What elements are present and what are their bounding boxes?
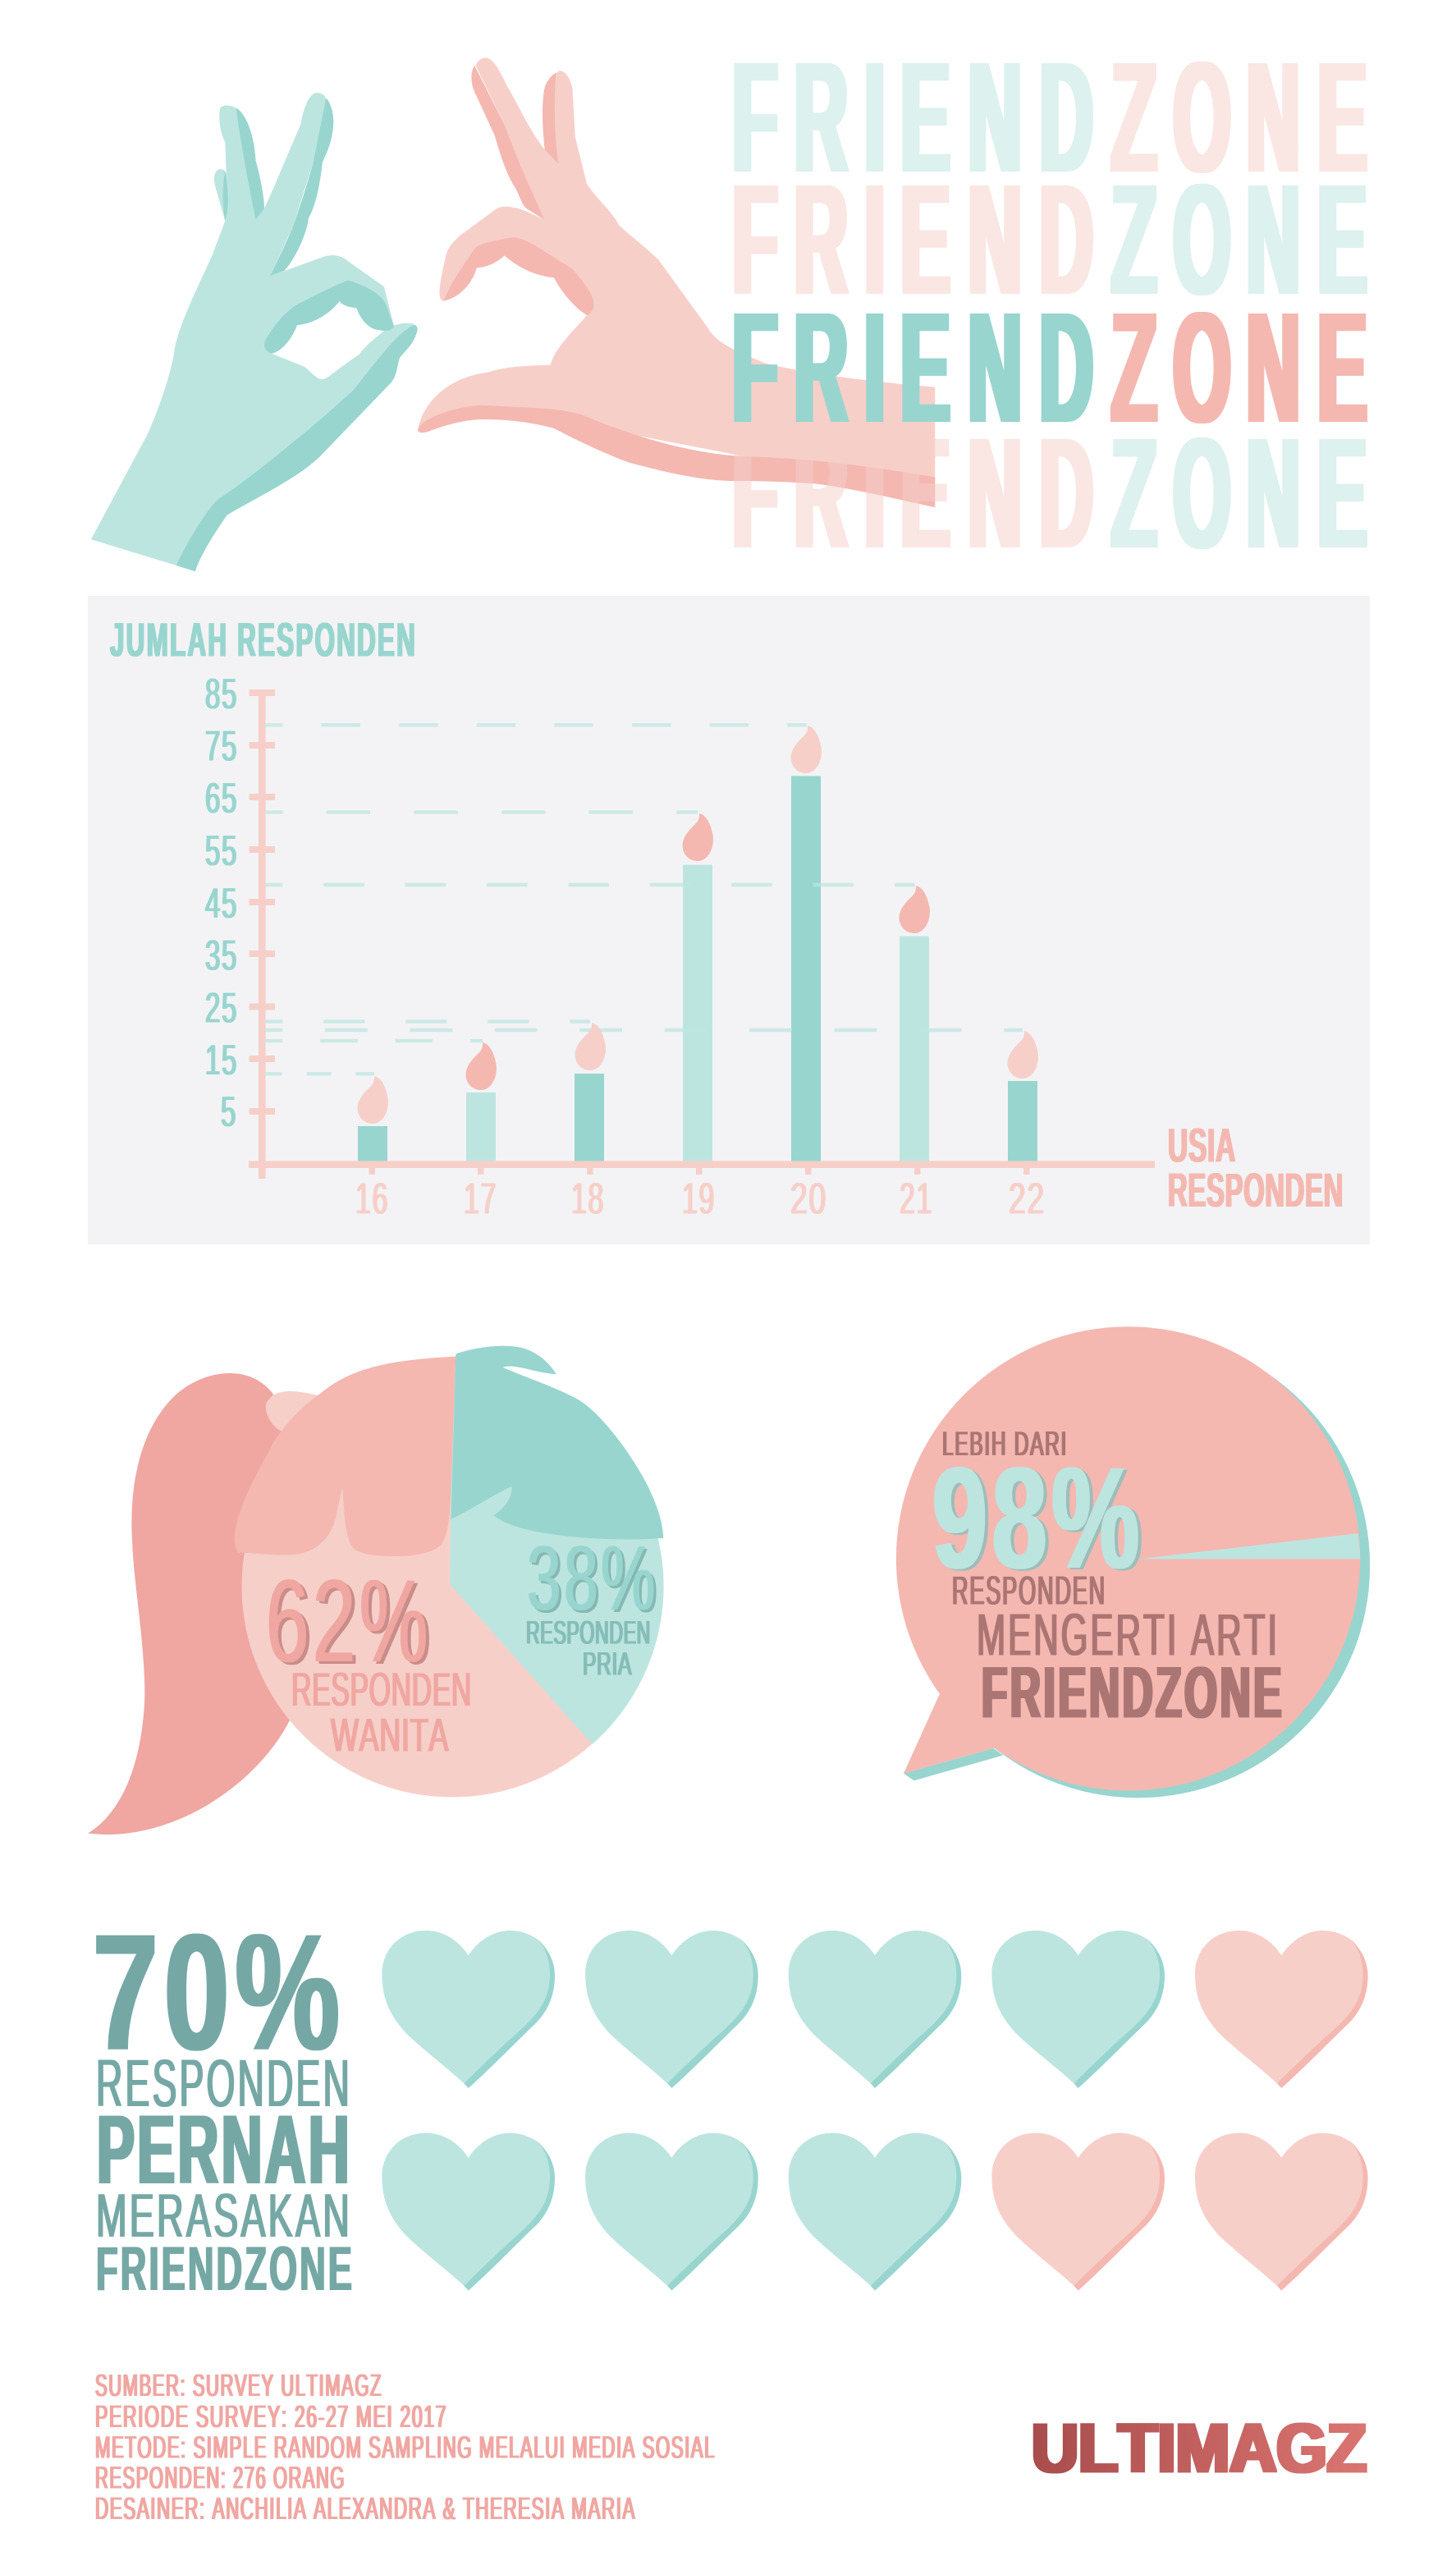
x axis labels: [355, 1174, 1046, 1223]
title: friendzone row 2: ZONE: [1111, 151, 1367, 327]
label: lebih dari: LEBIH DARI: [942, 1425, 1068, 1463]
stat: 38%: 38%: [527, 1528, 658, 1629]
title: friendzone row 1: FRIEND: [732, 29, 1093, 205]
x axis title: usia responden: USIA: [1168, 1120, 1236, 1172]
label: merasakan: MERASAKAN: [96, 2181, 352, 2250]
y axis labels: 15: [205, 1037, 238, 1084]
label: responden wanita: WANITA: [331, 1709, 449, 1761]
bars: [358, 776, 1037, 1162]
footer: survey credits: [95, 2368, 716, 2526]
heart 5 pink: [1195, 1931, 1368, 2088]
y axis labels: 65: [205, 775, 238, 822]
x axis labels: 18: [571, 1174, 605, 1223]
label: responden pria: RESPONDEN: [526, 1615, 651, 1651]
title: friendzone row 3 highlighted: ZONE: [1111, 279, 1367, 456]
heart 1 teal: [382, 1931, 555, 2088]
hearts: 7 of 10 teal: [382, 1931, 1368, 2291]
stat: 70%: 70%: [93, 1899, 346, 2085]
panel: 70 percent text block: [93, 1899, 355, 2304]
y axis labels: 25: [205, 985, 238, 1033]
icon: candle flames: [358, 726, 1038, 1124]
y axis labels: 45: [205, 880, 238, 928]
label: friendzone: FRIENDZONE: [96, 2234, 355, 2304]
panel: bar chart of respondents by age: [88, 596, 1370, 1244]
title: friendzone row 4: ZONE: [1111, 405, 1367, 581]
heart 9 pink: [991, 2133, 1165, 2291]
hair: teal: [451, 1346, 663, 1539]
heart 8 teal: [789, 2133, 961, 2291]
footer: survey credits: RESPONDEN: 276 ORANG: [95, 2461, 346, 2496]
heart 3 teal: [789, 1931, 961, 2088]
y axis labels: 35: [205, 932, 238, 980]
label: responden pria: PRIA: [583, 1647, 632, 1683]
stat: 62%: 62%: [266, 1556, 432, 1687]
footer: survey credits: DESAINER: ANCHILIA ALEXANDRA & THERESIA MARIA: [95, 2491, 636, 2526]
logo: ultimagz: ULTIMAGZ: [1032, 2410, 1367, 2487]
x axis labels: 16: [355, 1174, 389, 1223]
footer: survey credits: SUMBER: SURVEY ULTIMAGZ: [95, 2368, 382, 2403]
hair tie: [266, 1391, 318, 1432]
bubble: [896, 1326, 1370, 1798]
illustration: pink hand: [418, 57, 935, 507]
chart title: jumlah responden: JUMLAH RESPONDEN: [110, 614, 417, 666]
footer: survey credits: PERIODE SURVEY: 26-27 MEI 2017: [95, 2399, 447, 2434]
ponytail: [88, 1373, 291, 1834]
title: friendzone row 4: [732, 405, 1367, 581]
x axis labels: 21: [900, 1174, 933, 1223]
footer: survey credits: METODE: SIMPLE RANDOM SAMPLING MELALUI MEDIA SOSIAL: [95, 2430, 716, 2465]
label: responden: RESPONDEN: [96, 2046, 352, 2121]
stat: 98%: 98%: [932, 1438, 1144, 1599]
pie: 38 percent male: [450, 1376, 664, 1744]
title: friendzone row 1: [732, 29, 1367, 205]
title: friendzone row 4: FRIEND: [732, 405, 1093, 581]
label: responden: RESPONDEN: [952, 1569, 1106, 1614]
y axis labels: 75: [205, 722, 238, 770]
y axis labels: 85: [205, 671, 238, 718]
illustration: teal hand: [91, 93, 418, 571]
x axis labels: 22: [1009, 1174, 1046, 1223]
title: friendzone row 3 highlighted: [732, 279, 1367, 456]
label: responden pria: [526, 1615, 651, 1683]
hair: pink fringe: [235, 1357, 456, 1556]
panel: speech bubble 98 percent: [896, 1326, 1370, 1798]
heart 2 teal: [585, 1931, 758, 2088]
y axis labels: 5: [221, 1088, 237, 1136]
label: pernah: PERNAH: [97, 2096, 352, 2205]
heart 6 teal: [382, 2133, 555, 2291]
y axis labels: [205, 671, 238, 1136]
chart axes: [249, 689, 1155, 1179]
x axis labels: 20: [790, 1174, 827, 1223]
label: responden wanita: RESPONDEN: [291, 1664, 472, 1716]
y axis labels: 55: [205, 827, 238, 875]
heart 7 teal: [585, 2133, 758, 2291]
title: friendzone row 1: ZONE: [1111, 29, 1367, 205]
x axis title: usia responden: [1168, 1120, 1344, 1217]
title: friendzone row 2: FRIEND: [732, 151, 1093, 327]
title: friendzone row 2: [732, 151, 1367, 327]
pie: 62 percent female: [241, 1376, 663, 1798]
label: responden wanita: [291, 1664, 472, 1761]
title: friendzone row 3 highlighted: FRIEND: [732, 279, 1093, 456]
panel: gender pie with ponytail head: [88, 1346, 664, 1834]
x axis labels: 17: [464, 1174, 497, 1223]
heart 4 teal: [991, 1931, 1165, 2088]
heart 10 pink: [1195, 2133, 1368, 2291]
x axis labels: 19: [682, 1174, 716, 1223]
